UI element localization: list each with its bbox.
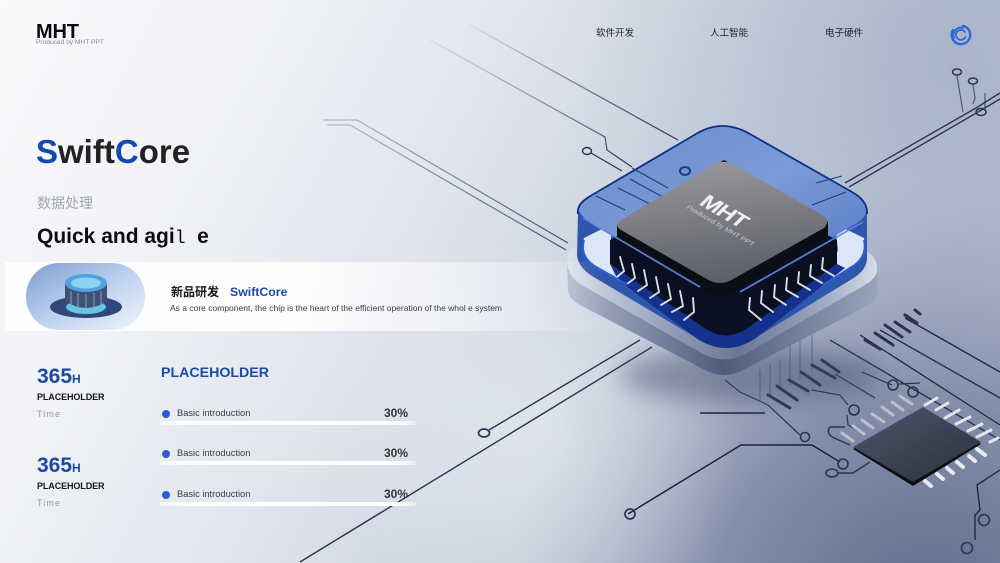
stat block 1 — [37, 365, 104, 419]
chip top face — [617, 160, 828, 294]
stat block 2: 365H — [37, 454, 81, 477]
text: Basic introduction — [177, 489, 250, 499]
chip label: MHT — [695, 191, 754, 232]
navigation: 软件开发 — [596, 28, 634, 39]
small chip — [842, 396, 998, 486]
main chip in glass case: Produced by MHT PPT — [685, 205, 756, 248]
stat block 2 — [37, 454, 104, 508]
text: 30% — [384, 487, 408, 501]
dark chip body — [610, 180, 837, 336]
list row 2 — [160, 446, 416, 465]
logo — [36, 21, 104, 46]
circuit traces — [300, 25, 1000, 562]
text: Basic introduction — [177, 408, 250, 418]
text: Basic introduction — [177, 448, 250, 458]
navigation: 电子硬件 — [825, 28, 863, 39]
icon: feature image pill — [26, 263, 145, 330]
glass top face — [578, 126, 866, 293]
stat block 1: PLACEHOLDER — [37, 392, 104, 402]
pins right — [749, 258, 834, 320]
navigation: 人工智能 — [710, 28, 748, 39]
stat block 1: Time — [37, 409, 61, 419]
shadow of big chip — [620, 347, 880, 403]
glass front edge highlights — [583, 218, 863, 292]
main chip in glass case — [567, 126, 877, 375]
list row 1 — [160, 406, 416, 425]
feature description: As a core component, the chip is the heart of the efficient operation of the whol e system — [170, 303, 502, 313]
panel: feature band — [5, 262, 605, 331]
subtitle: 数据处理 — [37, 195, 93, 211]
feature heading: 新品研发 SwiftCore — [171, 285, 287, 299]
stat block 1: 365H — [37, 365, 81, 388]
text: 30% — [384, 446, 408, 460]
icon: blue ring logo — [950, 24, 972, 46]
pads below the big chip — [768, 310, 920, 408]
list heading: PLACEHOLDER — [161, 365, 269, 381]
navigation — [596, 28, 863, 39]
list row 3 — [160, 487, 416, 506]
logo: MHT — [36, 21, 79, 43]
base plate — [567, 172, 877, 375]
stat block 2: PLACEHOLDER — [37, 481, 104, 491]
text: 30% — [384, 406, 408, 420]
logo: Produced by MHT PPT — [36, 39, 104, 46]
pins left — [617, 257, 694, 320]
glass lower body — [577, 126, 867, 348]
glass side windows — [583, 224, 625, 283]
title: SwiftCore — [36, 133, 190, 170]
stat block 2: Time — [37, 498, 61, 508]
tagline: Quick and agil e — [37, 225, 209, 249]
